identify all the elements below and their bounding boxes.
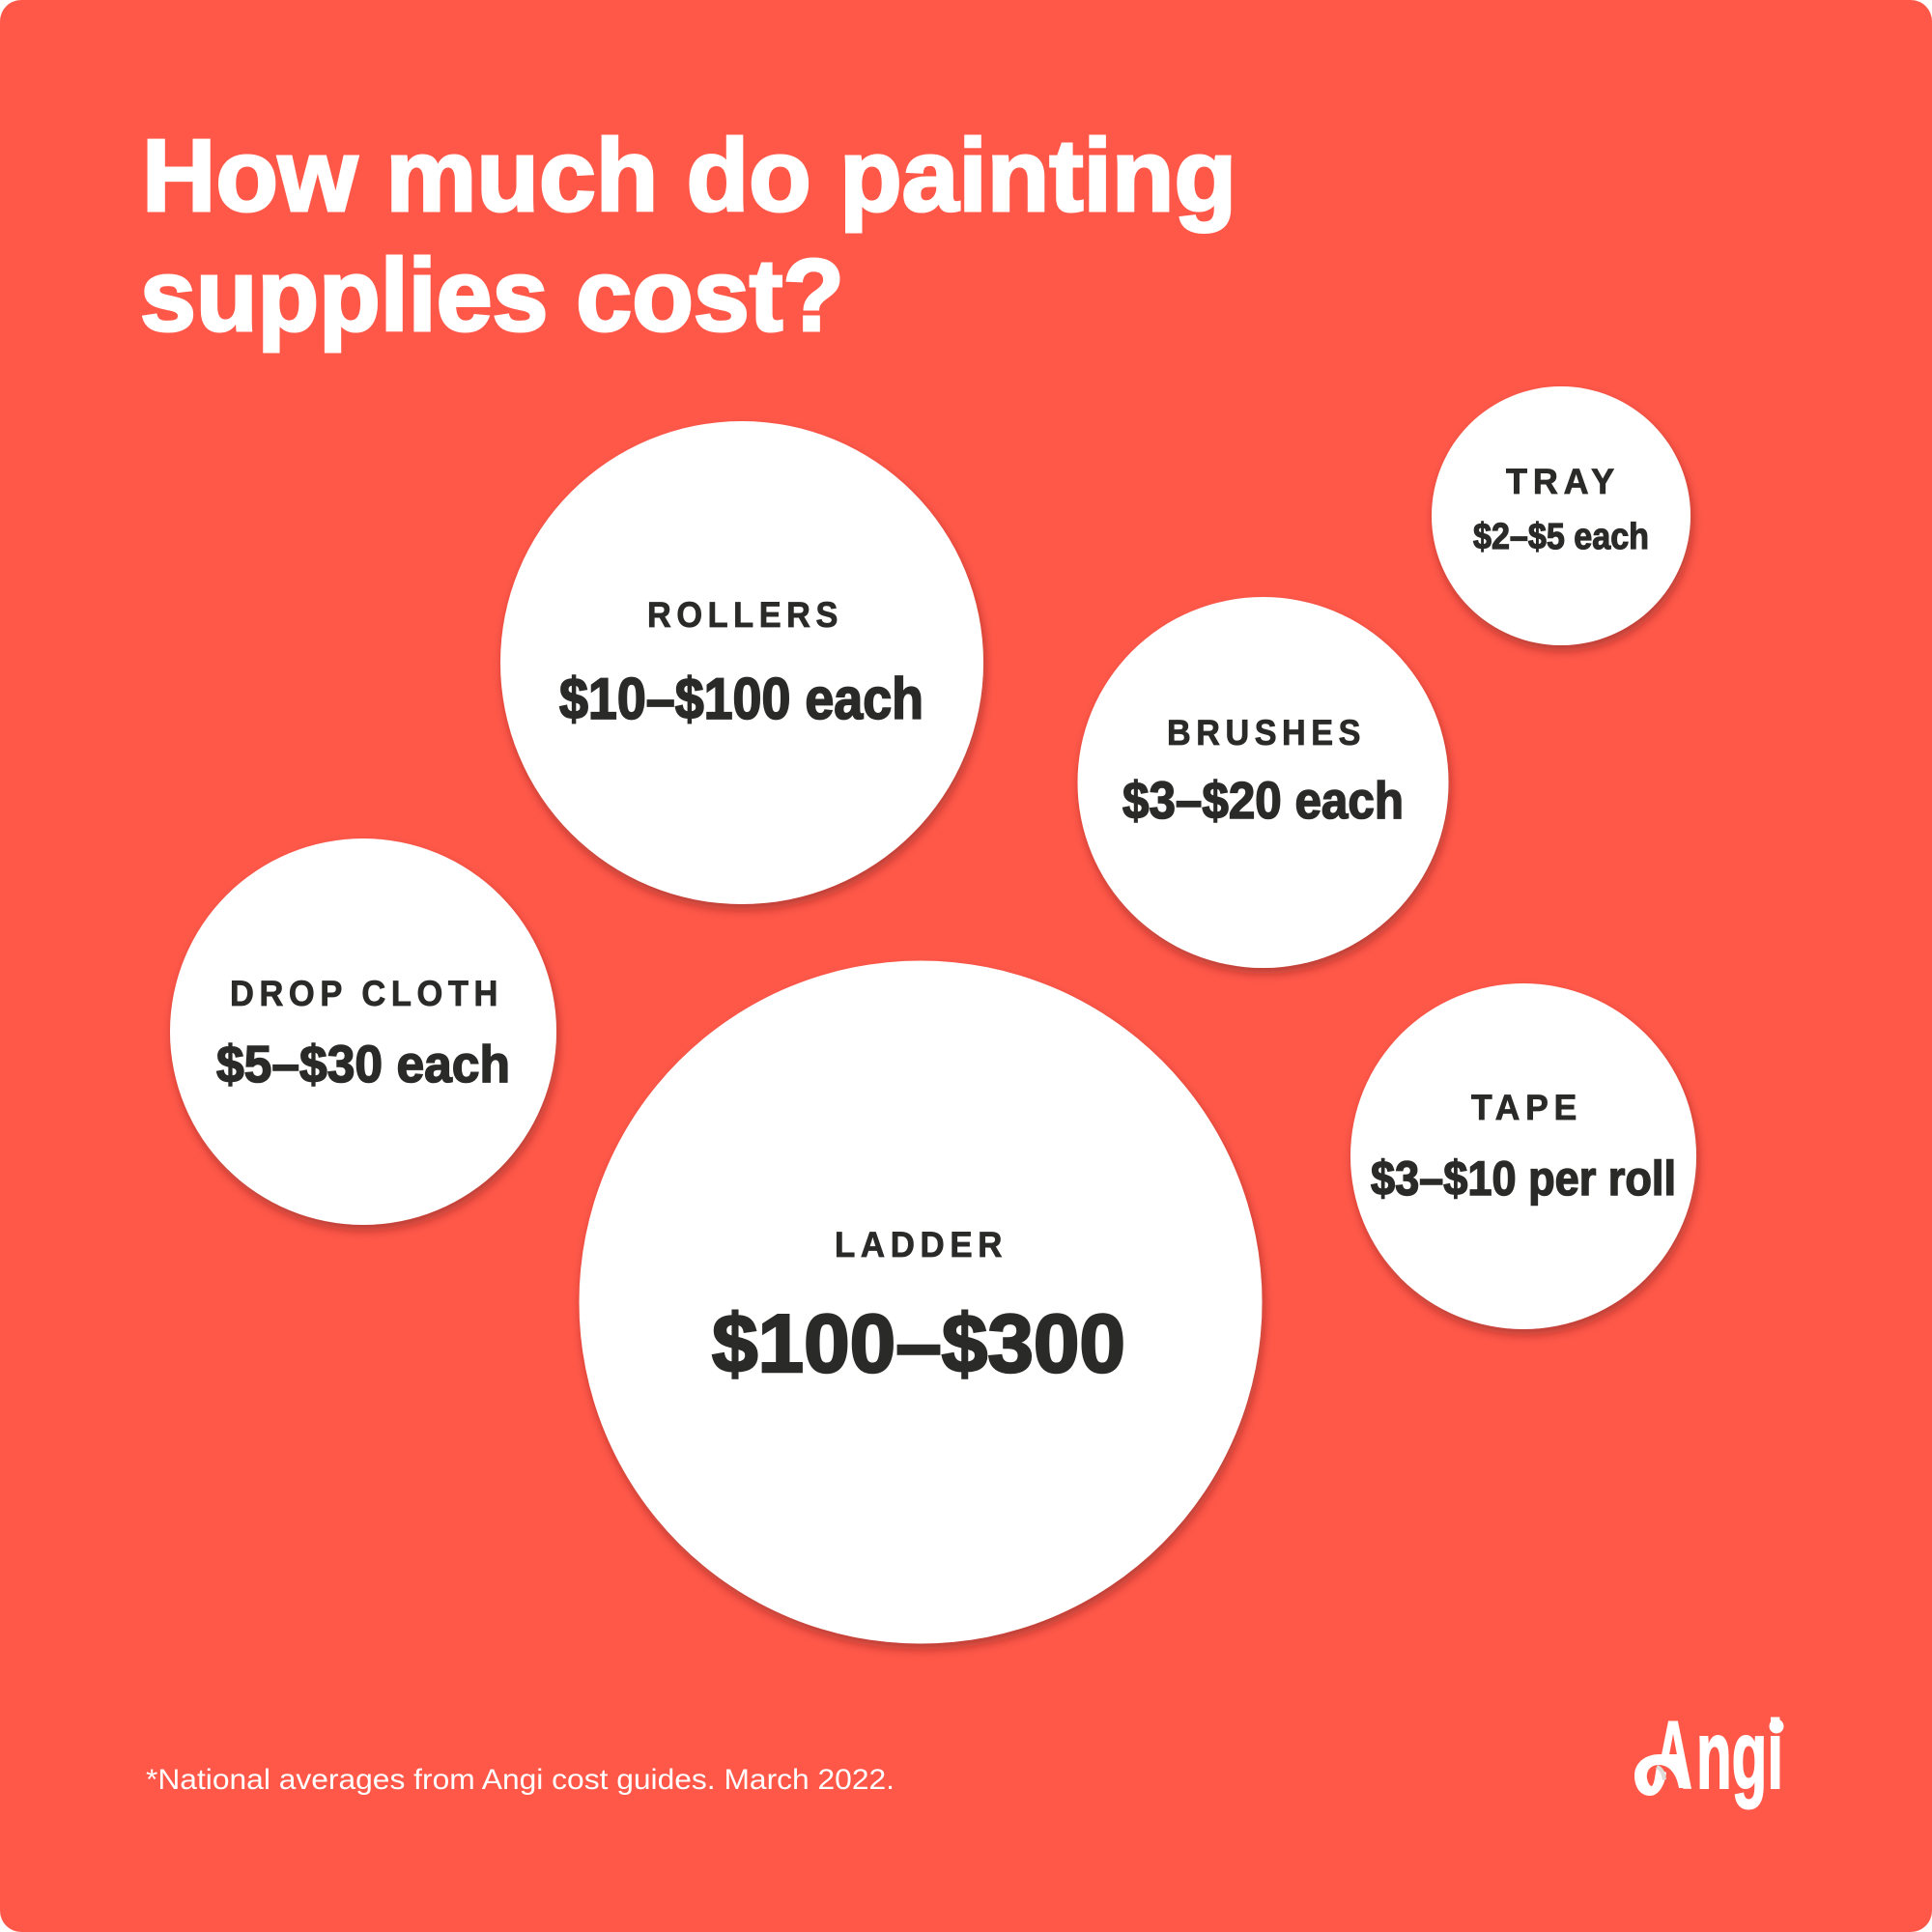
footnote: *National averages from Angi cost guides. March 2022.	[146, 1764, 895, 1796]
bubble: tape: $3–$10 per roll	[1371, 1151, 1676, 1206]
bubble: tray: TRAY	[1506, 462, 1620, 501]
logo: Angi: A	[1654, 1701, 1692, 1809]
title: How much do painting	[142, 119, 1236, 233]
bubble: drop cloth	[170, 838, 556, 1225]
bubble: brushes: BRUSHES	[1167, 713, 1366, 753]
bubble: rollers	[500, 421, 983, 904]
bubble: brushes	[1078, 597, 1449, 968]
logo: Angi: ngi	[1696, 1701, 1783, 1809]
title: supplies cost?	[140, 239, 844, 353]
bubble: ladder: $100–$300	[712, 1298, 1125, 1390]
bubble: tape: TAPE	[1471, 1088, 1582, 1127]
bubble: tape	[1350, 983, 1696, 1329]
bubble: brushes: $3–$20 each	[1122, 772, 1404, 830]
bubble: drop cloth: $5–$30 each	[216, 1036, 510, 1094]
bubble: ladder: LADDER	[835, 1225, 1008, 1264]
bubble: tray	[1432, 386, 1690, 645]
bubble: rollers: $10–$100 each	[559, 667, 923, 731]
bubble: tray: $2–$5 each	[1473, 517, 1649, 557]
logo: Angi	[1634, 1718, 1783, 1810]
bubble: drop cloth: DROP CLOTH	[230, 974, 503, 1013]
bubble: rollers: ROLLERS	[647, 595, 843, 635]
title	[140, 119, 1236, 353]
bubble: ladder	[580, 960, 1262, 1644]
